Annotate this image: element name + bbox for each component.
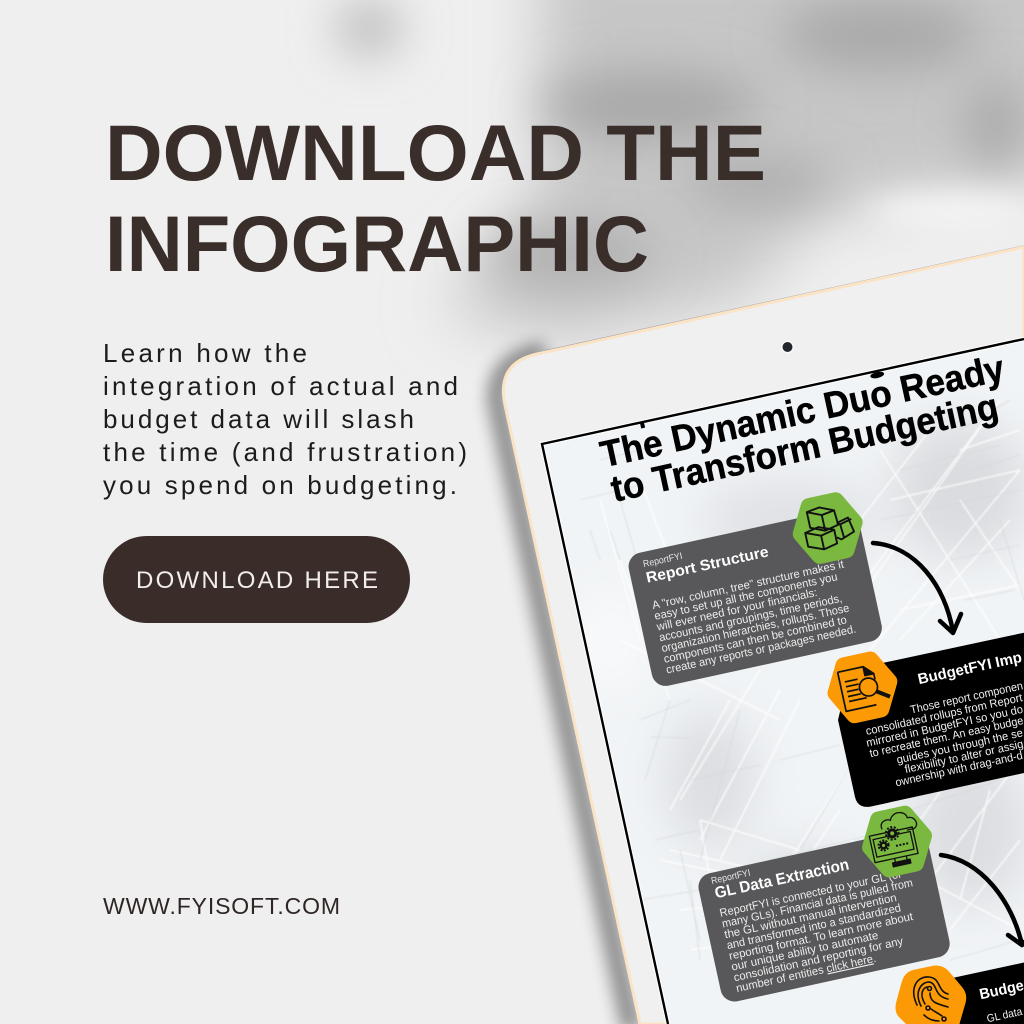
card: budgetfyi implementation: BudgetFYI Imp <box>916 649 1023 688</box>
card text: ReportFYI is connected to your GL (or <box>719 868 903 920</box>
card text: consolidated rollups from Report <box>865 692 1024 738</box>
description text: integration of actual and <box>103 371 458 401</box>
website url: WWW.FYISOFT.COM <box>103 893 340 919</box>
card: gl data extraction: ReportFYI <box>710 868 752 887</box>
card: budgetfyi implementation <box>831 628 1024 807</box>
download button <box>103 536 410 623</box>
card text: organization hierarchies, rollups. Those <box>660 602 851 655</box>
tablet camera <box>781 340 794 354</box>
card text: flexibility to alter or assig <box>904 739 1024 776</box>
icon: cloud, gears and monitor <box>865 808 929 872</box>
clipped heading descenders <box>640 371 885 430</box>
icon: fingerprint <box>895 966 966 1024</box>
card: budgetfyi second step <box>895 962 1024 1024</box>
card: report structure: Report Structure <box>644 543 770 587</box>
background with blurred shadows <box>322 0 1024 352</box>
description text: you spend on budgeting. <box>103 470 457 500</box>
description text: the time (and frustration) <box>103 437 467 467</box>
description text <box>103 338 467 500</box>
tablet screen <box>542 339 1024 1024</box>
card: report structure: ReportFYI <box>642 551 684 570</box>
card text: reporting format. To learn more about <box>728 911 915 963</box>
title: DOWNLOAD THE <box>105 108 766 197</box>
card: gl data extraction: GL Data Extraction <box>713 856 851 902</box>
icon: document with magnifier <box>831 657 894 718</box>
card text: and transformed into a standardized <box>726 902 902 952</box>
arrow: gl data extraction to budgetfyi <box>941 855 1023 945</box>
description text: Learn how the <box>103 338 307 368</box>
card text: our unique ability to automate <box>730 930 879 974</box>
card text <box>650 558 860 677</box>
title <box>105 108 766 288</box>
download button: DOWNLOAD HERE <box>136 567 378 594</box>
card text: A "row, column, tree" structure makes it <box>651 558 846 612</box>
card text: mirrored in BudgetFYI so you do <box>865 704 1024 750</box>
card text <box>719 867 928 995</box>
card text: will ever need for your financials: <box>655 587 819 634</box>
card text: guides you through the se <box>896 727 1024 767</box>
card text: components can then be combined to <box>663 614 848 666</box>
title: INFOGRAPHIC <box>105 199 649 288</box>
card text <box>860 680 1024 794</box>
card text: number of entities click here. <box>735 953 877 995</box>
card text: create any reports or packages needed. <box>665 624 857 677</box>
description text: budget data will slash <box>103 404 414 434</box>
card text: many GLs). Financial data is pulled from <box>721 877 914 931</box>
arrow: report structure to budgetfyi <box>873 543 961 633</box>
tablet mockup <box>497 246 1024 1024</box>
screen heading: to Transform Budgeting <box>607 386 1002 510</box>
card text: the GL without manual intervention <box>723 892 898 941</box>
card: report structure <box>624 497 885 689</box>
card text: accounts and groupings, time periods, <box>658 593 843 644</box>
screen heading: The Dynamic Duo Ready <box>597 347 1008 475</box>
card: gl data extraction <box>692 808 952 1004</box>
icon: cubes <box>796 498 859 558</box>
card text: easy to set up all the components you <box>653 571 839 623</box>
card text: consolidation and reporting for any <box>733 936 905 984</box>
